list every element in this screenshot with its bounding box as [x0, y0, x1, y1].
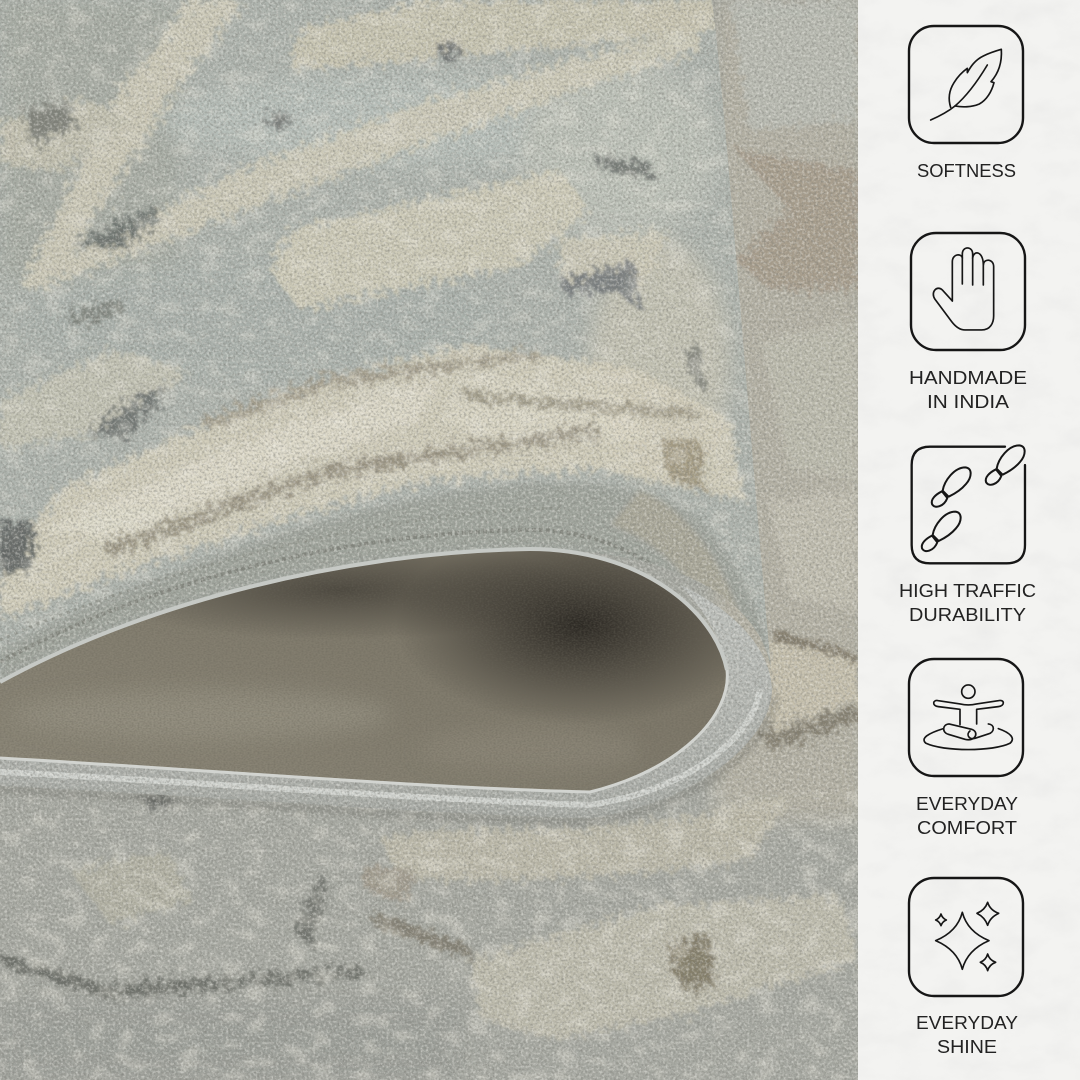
label: handmade in india [909, 368, 1027, 412]
drop shadow under roll [0, 695, 776, 822]
underside rim highlights [0, 549, 727, 792]
feature: everyday comfort [909, 659, 1023, 838]
label: handmade in india: HANDMADE [909, 368, 1027, 388]
label: high traffic durability: DURABILITY [909, 605, 1026, 625]
rolled rug top surface [0, 0, 800, 720]
rug edge binding [0, 585, 772, 818]
feature: high traffic durability [899, 445, 1036, 625]
feature: softness [909, 26, 1023, 181]
label: everyday shine [916, 1013, 1018, 1057]
feature: handmade in india [909, 233, 1027, 412]
label: everyday comfort [916, 794, 1018, 838]
side panel [858, 0, 1080, 1080]
roll edge band [0, 482, 772, 690]
rug underside [0, 551, 726, 790]
label: everyday shine: EVERYDAY [916, 1013, 1018, 1033]
label: high traffic durability: HIGH TRAFFIC [899, 581, 1036, 601]
icon: meditating figure [909, 659, 1023, 776]
icon: hand [911, 233, 1025, 350]
rug pattern bands [0, 0, 745, 620]
icon: footprints [912, 445, 1025, 563]
feature: everyday shine [909, 878, 1023, 1057]
label: everyday shine: SHINE [937, 1037, 997, 1057]
carpet grain [0, 0, 858, 1080]
icon: sparkles [909, 878, 1023, 996]
label: handmade in india: IN INDIA [927, 392, 1009, 412]
label: everyday comfort: EVERYDAY [916, 794, 1018, 814]
icon: feather [909, 26, 1023, 143]
label: everyday comfort: COMFORT [917, 818, 1017, 838]
label: softness: SOFTNESS [917, 161, 1016, 181]
label: high traffic durability [899, 581, 1036, 625]
